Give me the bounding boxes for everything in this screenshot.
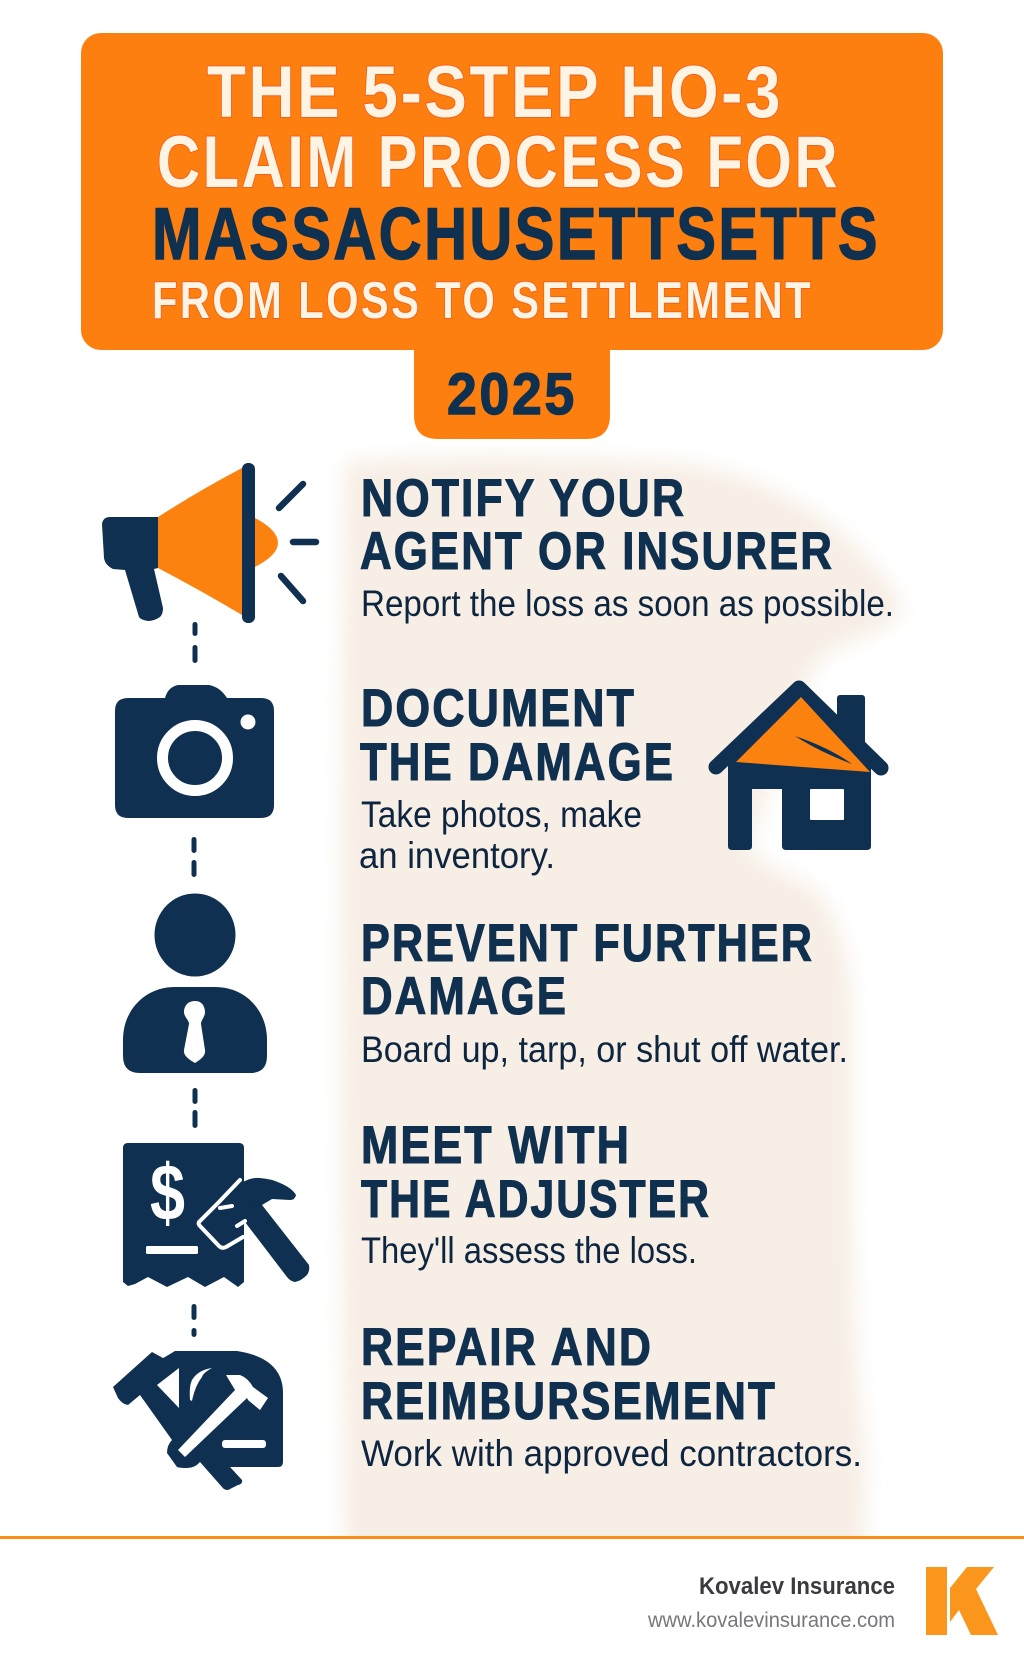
year tab xyxy=(414,348,610,439)
step 2 heading xyxy=(360,679,675,792)
connector dashes 3 xyxy=(192,1088,198,1128)
step 4 text: They'll assess the loss. xyxy=(361,1230,697,1271)
step 3 xyxy=(361,914,848,1070)
step 2 text: Take photos, make xyxy=(361,794,642,835)
title line 2: CLAIM PROCESS FOR xyxy=(157,122,840,203)
company name: Kovalev Insurance xyxy=(699,1573,895,1600)
step 5 text: Work with approved contractors. xyxy=(361,1433,862,1474)
website: www.kovalevinsurance.com xyxy=(647,1609,895,1632)
step 4 xyxy=(361,1116,711,1271)
step 5 xyxy=(361,1318,862,1474)
step 1 xyxy=(360,469,894,624)
step 5 heading: REIMBURSEMENT xyxy=(361,1372,777,1431)
step 3 text: Board up, tarp, or shut off water. xyxy=(361,1029,848,1070)
step 3 heading: PREVENT FURTHER xyxy=(361,914,814,973)
title line 1: THE 5-STEP HO-3 xyxy=(207,52,783,133)
icon: receipt and hammer xyxy=(123,1143,309,1287)
icon: K logo xyxy=(926,1567,998,1635)
step 1 heading: AGENT OR INSURER xyxy=(360,522,834,581)
step 2 text: an inventory. xyxy=(359,835,555,876)
icon: megaphone xyxy=(102,463,316,623)
background panel: cream blob behind steps xyxy=(341,456,901,1560)
title banner xyxy=(81,33,943,350)
step 4 heading xyxy=(361,1116,711,1229)
step 1 text: Report the loss as soon as possible. xyxy=(361,583,894,624)
connector dashes 1 xyxy=(192,622,198,663)
step 5 heading xyxy=(361,1318,777,1431)
footer xyxy=(647,1567,998,1635)
icon: adjuster person xyxy=(123,894,267,1073)
connector dashes 4 xyxy=(192,1304,196,1337)
step 5 heading: REPAIR AND xyxy=(361,1318,653,1377)
year: 2025 xyxy=(447,362,577,427)
icon: damaged house xyxy=(716,688,881,850)
step 4 heading: MEET WITH xyxy=(361,1116,631,1175)
step 1 heading: NOTIFY YOUR xyxy=(361,469,686,528)
step 2 text xyxy=(359,794,642,876)
connector dashes 2 xyxy=(192,837,196,877)
step 3 heading xyxy=(361,914,814,1026)
icon: receipt and hammer: $ xyxy=(150,1148,185,1237)
step 4 heading: THE ADJUSTER xyxy=(361,1170,711,1229)
title line 3: MASSACHUSETTSETTS xyxy=(152,194,880,275)
step 2 heading: THE DAMAGE xyxy=(360,733,675,792)
step 3 heading: DAMAGE xyxy=(361,967,568,1026)
icon: camera xyxy=(115,685,274,818)
step 2 heading: DOCUMENT xyxy=(361,679,636,738)
step 2 xyxy=(359,679,675,876)
subtitle: FROM LOSS TO SETTLEMENT xyxy=(152,272,813,330)
icon: repair tools xyxy=(113,1351,283,1490)
step 1 heading xyxy=(360,469,834,581)
